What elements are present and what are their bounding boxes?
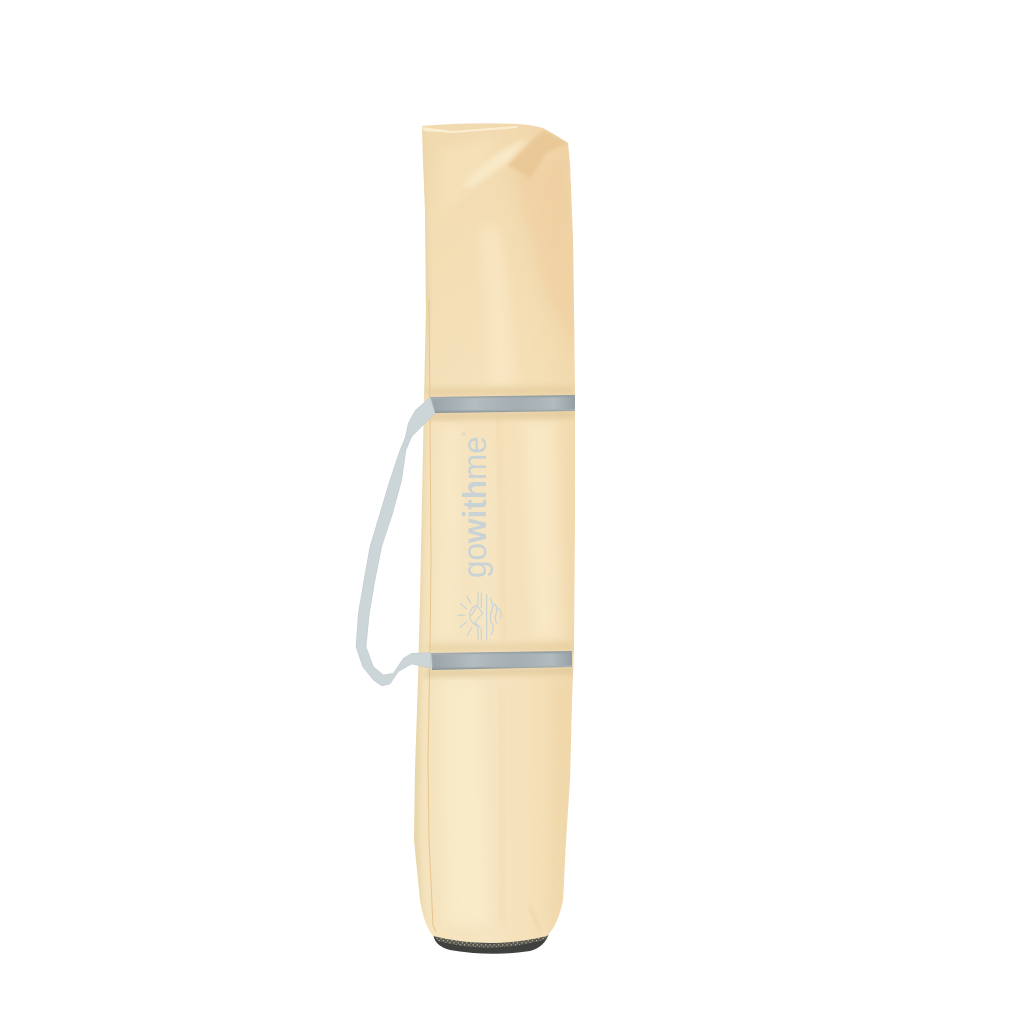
logo wordmark: gowithme (456, 434, 493, 578)
shadows beside bands (425, 386, 575, 397)
upper webbing band (430, 395, 575, 413)
mesh base of bag (433, 933, 549, 954)
middle and lower fabric folds (525, 422, 561, 638)
side seam (428, 300, 436, 932)
bag body (414, 123, 575, 943)
logo wordmark: ® (461, 431, 468, 436)
top fabric folds (405, 126, 577, 940)
carrying handle strap (356, 397, 435, 686)
logo icon: sun and waves (457, 593, 501, 641)
lower webbing band (431, 651, 572, 670)
